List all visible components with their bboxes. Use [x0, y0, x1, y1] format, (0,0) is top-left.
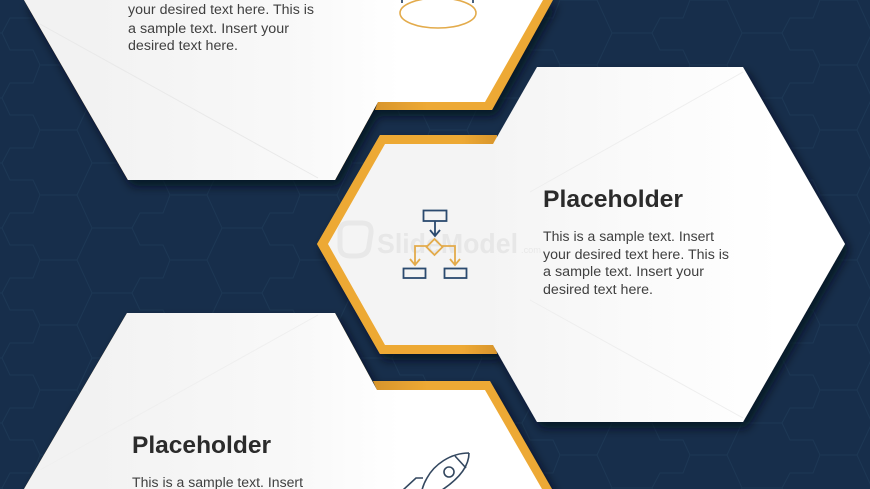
panel: middle hexagon — [317, 67, 845, 422]
watermark — [340, 223, 541, 259]
middle hexagon white shape — [493, 67, 845, 422]
middle hexagon body text — [543, 229, 729, 297]
icon: ellipse base — [400, 0, 476, 28]
panel: top hexagon: desired text here. — [128, 38, 238, 53]
middle hexagon body text: desired text here. — [543, 282, 653, 297]
bottom hexagon heading: Placeholder — [132, 432, 271, 459]
panel: top hexagon: your desired text here. This is — [128, 2, 314, 17]
watermark: .com — [521, 245, 541, 255]
watermark: SlideModel — [377, 228, 518, 259]
middle hexagon orange frame — [317, 135, 497, 354]
middle hexagon body text: This is a sample text. Insert — [543, 229, 714, 244]
middle hexagon body text: your desired text here. This is — [543, 247, 729, 262]
middle hexagon frame shadow — [317, 135, 497, 354]
panel: bottom hexagon — [24, 313, 552, 489]
icon: rocket — [403, 453, 469, 489]
middle hexagon heading: Placeholder — [543, 186, 683, 213]
middle hexagon inner fill — [328, 144, 494, 345]
icon: flowchart — [404, 210, 466, 278]
panel: top hexagon: a sample text. Insert your — [128, 21, 290, 36]
top hexagon shape — [24, 0, 553, 180]
middle hexagon body text: a sample text. Insert your — [543, 264, 705, 279]
panel: top hexagon — [24, 0, 553, 180]
bottom hexagon shape — [24, 313, 552, 489]
